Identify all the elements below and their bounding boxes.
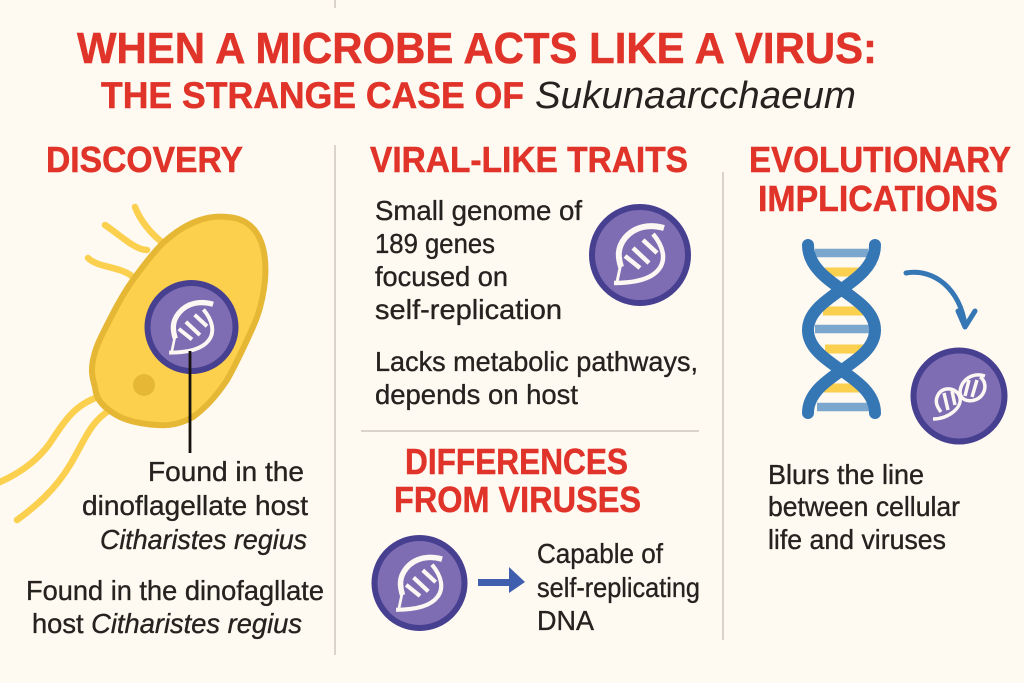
heading: evolutionary implications: IMPLICATIONS <box>758 178 998 219</box>
icon: virus-like circle <box>914 350 1004 442</box>
panel: differences from viruses <box>374 441 700 636</box>
text block: small genome: 189 genes <box>375 228 495 259</box>
text block: self-replicating: DNA <box>537 605 594 636</box>
icon: dinoflagellate cell <box>0 207 265 520</box>
text block: lacks metabolic pathways <box>375 346 698 410</box>
heading: viral-like traits: VIRAL-LIKE TRAITS <box>370 139 688 180</box>
text block: blurs the line: life and viruses <box>768 524 946 555</box>
icon: genome circle <box>374 538 464 628</box>
text block: blurs the line <box>768 459 960 555</box>
text block: lacks metabolic pathways: depends on host <box>375 379 578 410</box>
icon: genome circle <box>592 207 688 303</box>
callout: host label: Citharistes regius <box>100 524 307 555</box>
text block: lacks metabolic pathways: Lacks metabolic pathways, <box>375 346 698 377</box>
text block: blurs the line: between cellular <box>768 491 960 522</box>
callout: host label: dinoflagellate host <box>82 490 308 521</box>
text block: small genome: focused on <box>375 261 508 292</box>
text block: blurs the line: Blurs the line <box>768 459 924 490</box>
title: THE STRANGE CASE OF <box>101 75 524 116</box>
heading: discovery: DISCOVERY <box>46 139 243 180</box>
panel: viral-like traits <box>370 139 698 410</box>
arrow <box>478 567 525 593</box>
text block: self-replicating: self-replicating <box>537 572 700 603</box>
heading: differences from viruses: FROM VIRUSES <box>394 479 641 520</box>
arrow: curved <box>906 272 975 327</box>
text block: small genome: self-replication <box>375 294 562 325</box>
text block: small genome <box>375 195 582 325</box>
heading: evolutionary implications <box>749 139 1011 219</box>
panel: discovery <box>0 139 324 639</box>
panel: evolutionary implications <box>749 139 1011 555</box>
icon: dna helix <box>808 245 875 413</box>
text block: host repeat <box>26 575 324 639</box>
text block: host repeat: Found in the dinofagllate <box>26 575 324 606</box>
heading: differences from viruses <box>394 441 641 520</box>
text block: host repeat: host Citharistes regius <box>32 608 302 639</box>
title <box>77 24 877 117</box>
callout: host label <box>82 456 308 555</box>
text block: self-replicating: Capable of <box>537 538 663 569</box>
title: Sukunaarcchaeum <box>535 75 856 117</box>
heading: differences from viruses: DIFFERENCES <box>405 441 628 482</box>
text block: small genome: Small genome of <box>375 195 582 226</box>
text block: self-replicating <box>537 538 700 636</box>
callout: host label: Found in the <box>148 456 304 487</box>
title: WHEN A MICROBE ACTS LIKE A VIRUS: <box>77 24 877 73</box>
